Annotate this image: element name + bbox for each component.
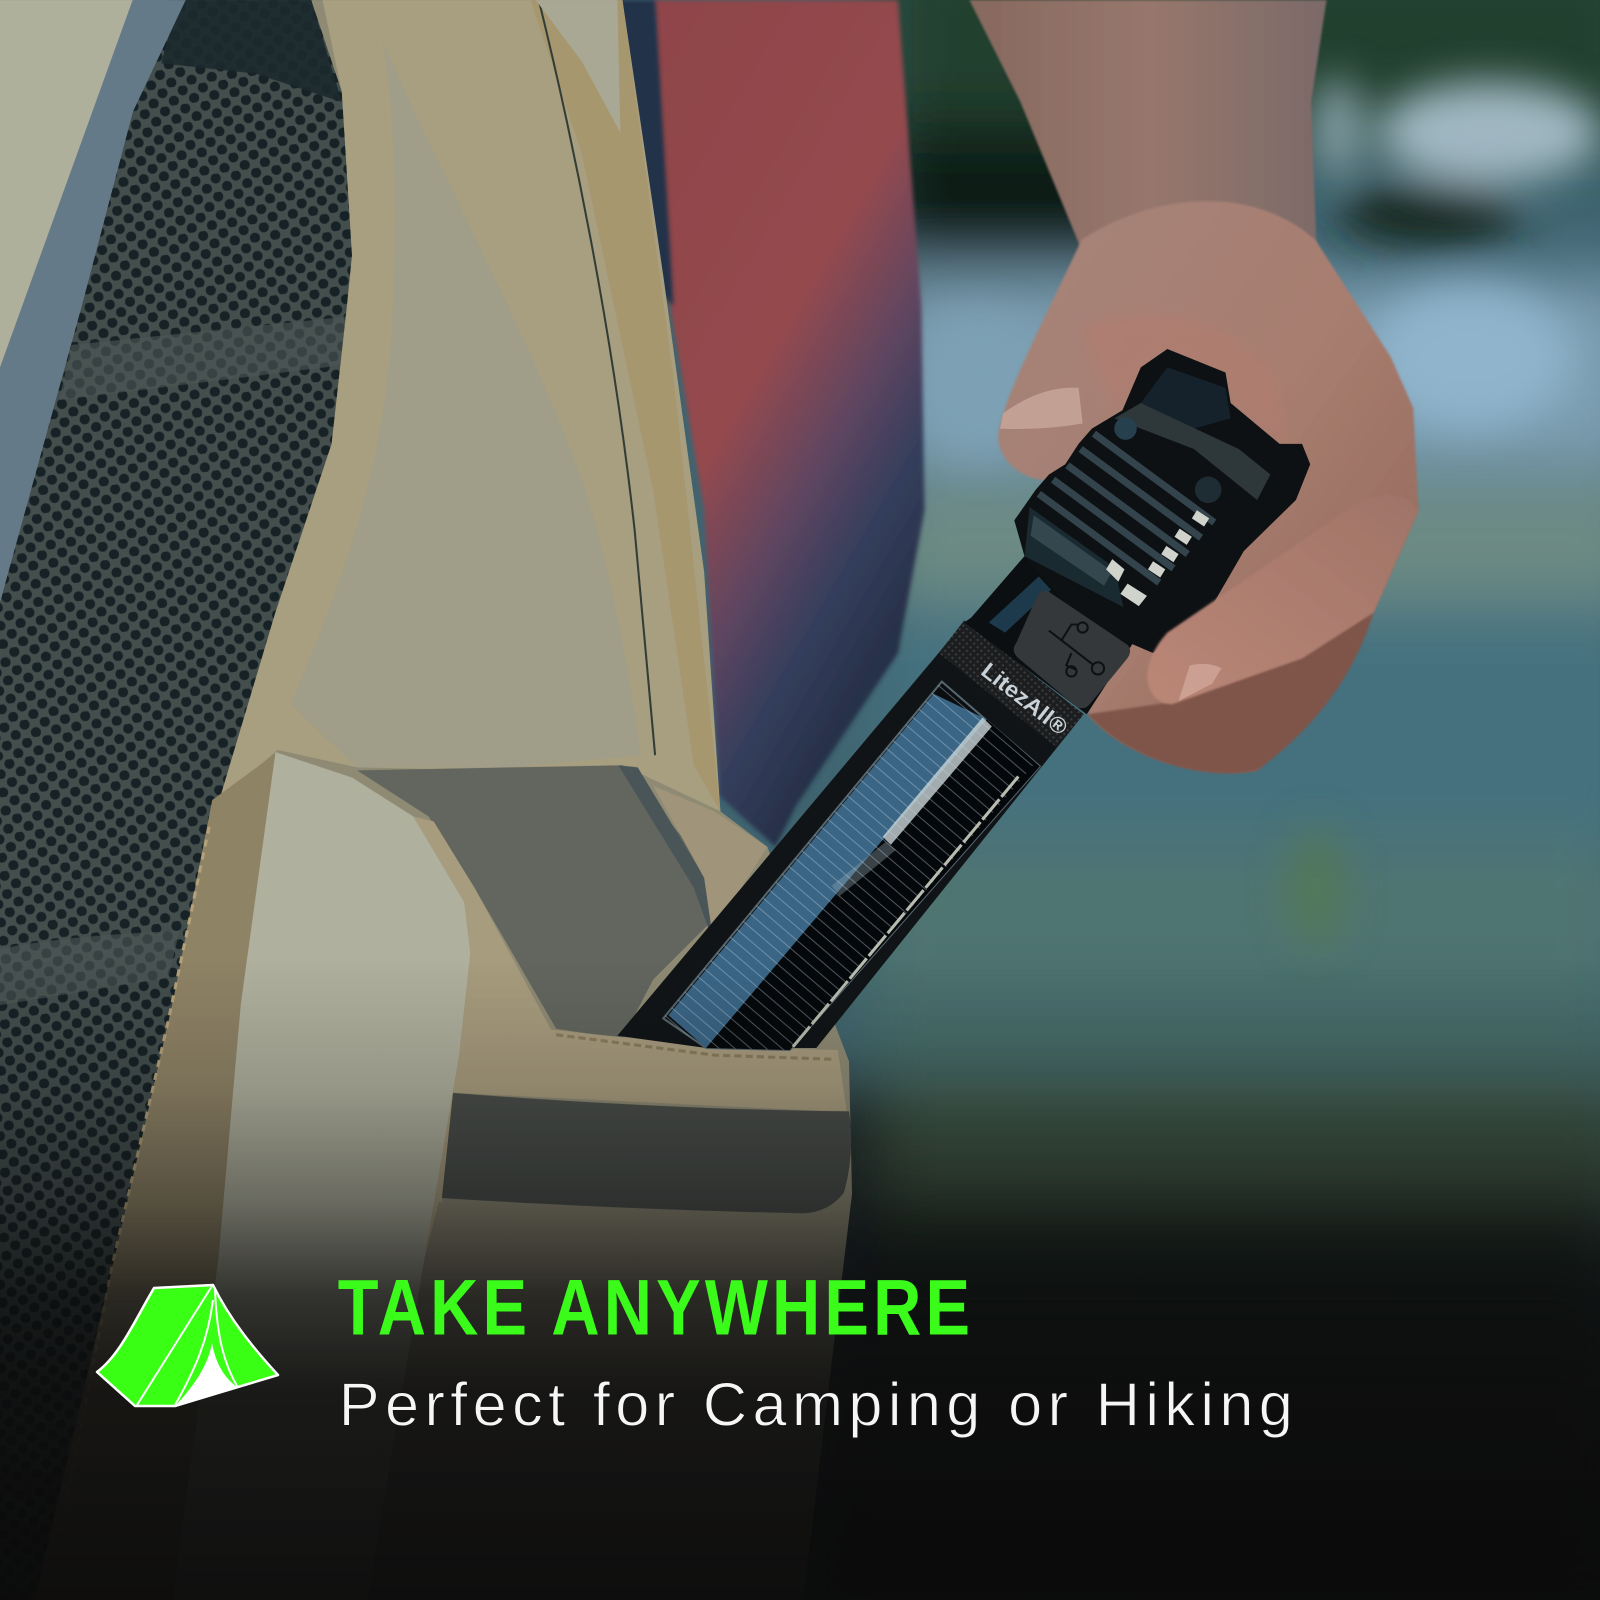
photo: arm and hand xyxy=(969,0,1418,772)
front pocket lower xyxy=(367,1202,832,1600)
thumb nail xyxy=(1000,388,1083,429)
mesh back padding xyxy=(0,0,352,1600)
top left beige panel xyxy=(0,0,135,367)
photo: flashlight xyxy=(617,349,1310,1115)
icon: green tent xyxy=(97,1285,278,1406)
velcro band xyxy=(442,1093,851,1213)
usb rubber cap xyxy=(1014,591,1130,708)
brand logo: LitezAll® xyxy=(977,658,1073,741)
centre grey-beige panel xyxy=(291,41,641,767)
index finger xyxy=(1147,495,1418,704)
cooling ribs xyxy=(1039,434,1214,583)
photo: fingers wrapped over flashlight xyxy=(1088,495,1418,773)
heading: TAKE ANYWHERE xyxy=(338,1265,970,1352)
subheading: Perfect for Camping or Hiking xyxy=(339,1371,1293,1439)
beige underlay xyxy=(0,0,852,1600)
fingernail xyxy=(1179,664,1221,701)
forearm xyxy=(969,0,1327,250)
palm crease shade xyxy=(1082,315,1286,449)
front pocket upper tan xyxy=(413,816,847,1259)
strap edge xyxy=(618,765,716,931)
hand back xyxy=(998,201,1418,772)
body tube xyxy=(617,622,1084,1048)
grey inner leather flap xyxy=(357,765,709,1039)
head shiny band xyxy=(1114,403,1270,500)
front pocket left panel xyxy=(172,752,470,1600)
ribbed head xyxy=(1014,349,1310,653)
head top plate xyxy=(1141,367,1231,429)
photo: backpack xyxy=(0,0,852,1600)
photo: red jacket xyxy=(618,0,924,847)
icon: usb symbol xyxy=(1049,622,1104,677)
grey webbing strap xyxy=(0,0,186,602)
main beige body xyxy=(219,0,720,811)
neck xyxy=(964,556,1153,714)
lower tan strap xyxy=(35,752,278,1600)
solar panel xyxy=(662,680,1042,1051)
lower fingers xyxy=(1088,612,1373,773)
beige side of pocket xyxy=(653,786,767,934)
mesh horizontal seams xyxy=(59,316,349,400)
